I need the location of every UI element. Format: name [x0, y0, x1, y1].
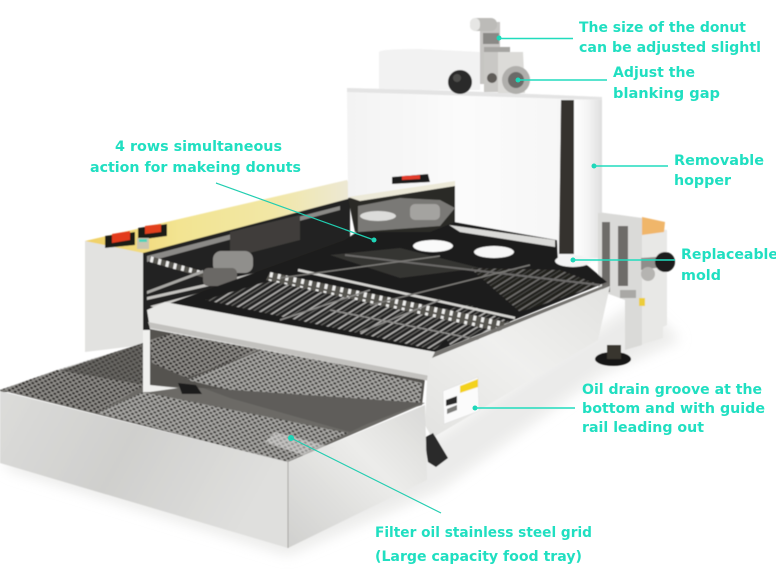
callout: filter oil grid and food tray: Filter oil stainless steel grid [375, 525, 592, 541]
callout: replaceable mold [570, 247, 776, 284]
back mesh filter panels [150, 322, 425, 440]
callout: blanking gap: Adjust the [613, 65, 695, 81]
bright strip on hopper [574, 100, 602, 258]
food tray drawer [0, 330, 427, 548]
callout: filter oil grid and food tray [288, 435, 592, 565]
callout: four rows action: 4 rows simultaneous [115, 139, 282, 155]
mold discs [413, 240, 591, 267]
callout: filter oil grid and food tray: (Large capacity food tray) [375, 549, 582, 565]
left upright post [143, 330, 150, 390]
left housing with yellow top and red switches [85, 180, 370, 352]
callout: four rows action [90, 139, 376, 242]
callout: removable hopper: hopper [674, 173, 732, 189]
callout: blanking gap [516, 65, 720, 102]
callout: replaceable mold: mold [681, 268, 721, 284]
hopper slanted lower plate [449, 225, 555, 247]
top adjustment mechanism [448, 18, 530, 94]
callout: blanking gap: blanking gap [613, 86, 720, 102]
callout: oil drain groove: rail leading out [582, 420, 704, 436]
rear feet and right support column [595, 212, 675, 366]
callout: donut size adjustment: The size of the donut [579, 20, 746, 36]
side body of fryer [425, 286, 610, 438]
hopper window with switches [348, 174, 455, 232]
callout: oil drain groove [472, 382, 765, 436]
floor shadow [0, 300, 680, 555]
warning label sticker [443, 377, 479, 424]
tray interior with frying channels [165, 222, 607, 352]
callout: donut size adjustment [496, 20, 761, 56]
callout: oil drain groove: Oil drain groove at the [582, 382, 762, 398]
removable hopper [347, 88, 602, 267]
callout: removable hopper: Removable [674, 153, 764, 169]
top rear housing [379, 49, 480, 90]
dark vertical strip [559, 100, 574, 254]
callout: four rows action: action for makeing donuts [90, 160, 301, 176]
front rail of the tray [147, 302, 435, 381]
callout: removable hopper [592, 153, 764, 189]
callout: oil drain groove: bottom and with guide [582, 401, 765, 417]
callout: donut size adjustment: can be adjusted slightl [579, 40, 761, 56]
front foot [424, 433, 448, 467]
